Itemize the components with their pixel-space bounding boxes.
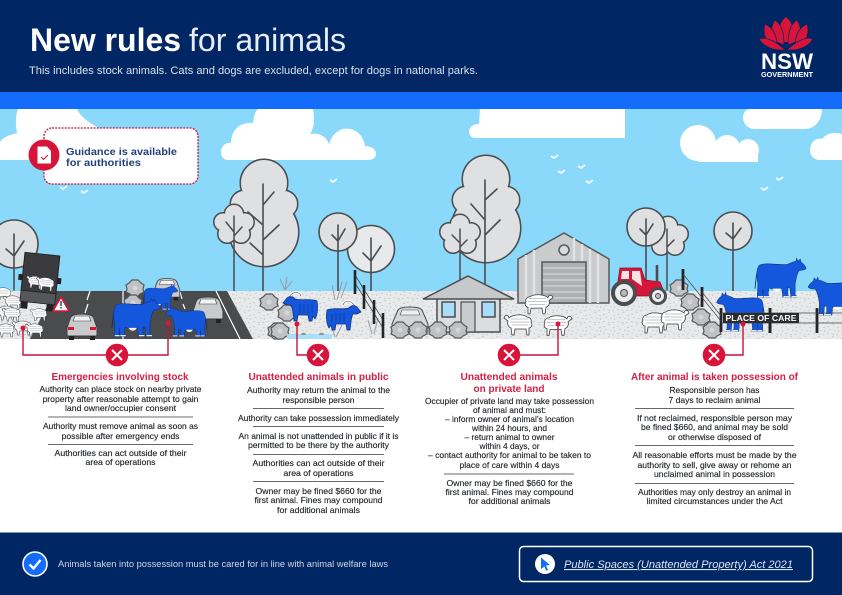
- panel: after animal is taken possession of: If not reclaimed, responsible person may: [637, 413, 793, 423]
- panel: unattended animals on private land: within 4 days, or: [479, 441, 540, 451]
- panel: unattended animals in public: first animal. Fines may compound: [254, 495, 383, 505]
- panel: unattended animals in public: Owner may be fined $660 for the: [256, 486, 382, 496]
- left fence: [355, 270, 383, 338]
- callout: guidance: Guidance is available: [66, 146, 177, 158]
- panel: after animal is taken possession of: Responsible person has: [670, 385, 760, 395]
- panel: unattended animals on private land: on private land: [474, 384, 544, 395]
- pond and grass: [280, 277, 378, 339]
- cows in place of care: [717, 258, 842, 331]
- panel: unattended animals on private land: [425, 372, 594, 506]
- link button: [520, 546, 812, 582]
- panel: after animal is taken possession of: After animal is taken possession of: [631, 372, 799, 383]
- connector: after possession: [703, 322, 746, 366]
- panel: after animal is taken possession of: authority to sell, give away or rehome an: [638, 460, 792, 470]
- NSW Government logo: GOVERNMENT: [761, 72, 814, 79]
- panel: after animal is taken possession of: limited circumstances under the Act: [646, 496, 783, 506]
- panel: emergencies involving stock: [40, 372, 202, 467]
- parked car: [392, 307, 428, 332]
- connector: public: [294, 322, 329, 366]
- tree: round pair: [319, 213, 394, 297]
- road: [30, 291, 253, 339]
- sky: [0, 109, 842, 291]
- connector: emergencies: [20, 320, 170, 366]
- panel: unattended animals in public: An animal is not unattended in public if it is: [238, 431, 398, 441]
- NSW Government logo: NSW: [761, 49, 813, 74]
- title: for animals: [189, 22, 346, 58]
- right fence and sign: [683, 269, 842, 333]
- tractor: [613, 265, 666, 304]
- panel: unattended animals on private land: – return animal to owner: [464, 432, 555, 442]
- house: [423, 276, 514, 332]
- panel: emergencies involving stock: possible after emergency ends: [62, 431, 180, 441]
- tree: big left: [230, 160, 298, 300]
- panel: unattended animals on private land: Owner may be fined $660 for the: [446, 478, 573, 488]
- panel: unattended animals in public: permitted to be there by the authority: [248, 440, 390, 450]
- tree: small centre: [440, 215, 480, 282]
- tree: right group: [627, 208, 752, 297]
- shrubs: [124, 280, 721, 339]
- panel: unattended animals in public: area of operations: [284, 468, 354, 478]
- panel: unattended animals in public: [238, 372, 400, 515]
- panel: emergencies involving stock: area of operations: [86, 457, 156, 467]
- panel: after animal is taken possession of: unclaimed animal in possession: [654, 469, 775, 479]
- right fence and sign: PLACE OF CARE: [726, 313, 797, 323]
- barn: [518, 233, 609, 303]
- icon: check: [23, 552, 47, 576]
- panel: unattended animals on private land: – inform owner of animal’s location: [445, 414, 574, 424]
- panel: emergencies involving stock: Authority must remove animal as soon as: [43, 421, 198, 431]
- panel: emergencies involving stock: Emergencies involving stock: [52, 372, 189, 383]
- title: New rules: [30, 22, 181, 58]
- panel: after animal is taken possession of: be fined $660, and animal may be sold: [641, 422, 788, 432]
- ground: [0, 291, 842, 339]
- tree: small left: [214, 205, 254, 291]
- panel: unattended animals in public: Authority can take possession immediately: [238, 413, 400, 423]
- panel: unattended animals on private land: of animal and must:: [473, 405, 546, 415]
- panel: after animal is taken possession of: Authorities may only destroy an animal in: [638, 487, 791, 497]
- goats: [283, 292, 361, 330]
- clouds: [0, 109, 842, 162]
- cows on road: [112, 284, 207, 336]
- subtitle: This includes stock animals. Cats and dogs are excluded, except for dogs in national parks.: [29, 65, 478, 77]
- panel: unattended animals on private land: – contact authority for animal to be taken to: [428, 450, 591, 460]
- panel: after animal is taken possession of: All reasonable efforts must be made by the: [632, 450, 797, 460]
- truck with sheep: [15, 252, 64, 312]
- footer note: Animals taken into possession must be cared for in line with animal welfare laws: [58, 559, 389, 569]
- panel: emergencies involving stock: land owner/occupier consent: [65, 403, 177, 413]
- house shrubs: [391, 322, 467, 338]
- link button: Public Spaces (Unattended Property) Act 2021: [564, 559, 793, 571]
- cars on road: [67, 278, 223, 340]
- panel: after animal is taken possession of: or otherwise disposed of: [668, 432, 762, 442]
- tree: big centre: [452, 156, 520, 285]
- sheep in paddock: [504, 295, 689, 335]
- NSW Government logo: [759, 17, 814, 79]
- panel: unattended animals in public: Authorities can act outside of their: [252, 458, 385, 468]
- panel: emergencies involving stock: property after reasonable attempt to gain: [42, 394, 199, 404]
- connector: private land: [498, 322, 560, 366]
- escaped sheep group: [0, 288, 47, 337]
- panel: unattended animals on private land: within 24 hours, and: [471, 423, 547, 433]
- panel: unattended animals on private land: place of care within 4 days: [460, 460, 560, 470]
- panel: after animal is taken possession of: 7 days to reclaim animal: [668, 395, 761, 405]
- panel: unattended animals on private land: Unattended animals: [460, 372, 558, 383]
- panel: emergencies involving stock: Authority can place stock on nearby private: [40, 384, 202, 394]
- panel: unattended animals in public: Unattended animals in public: [248, 372, 389, 383]
- birds: [60, 155, 783, 193]
- callout: guidance: for authorities: [66, 157, 141, 169]
- footer: [0, 532, 842, 595]
- panel: unattended animals in public: for additional animals: [277, 505, 360, 515]
- callout: guidance: [28, 128, 198, 184]
- panel: after animal is taken possession of: [631, 372, 799, 506]
- panel: unattended animals on private land: first animal. Fines may compound: [446, 487, 574, 497]
- panel: unattended animals on private land: Occupier of private land may take possession: [425, 396, 594, 406]
- panel: unattended animals on private land: for additional animals: [468, 496, 550, 506]
- tree: far left: [0, 220, 38, 290]
- panel: emergencies involving stock: Authorities can act outside of their: [54, 448, 187, 458]
- header band: [0, 0, 842, 109]
- trees: [0, 156, 752, 300]
- panel: unattended animals in public: Authority may return the animal to the: [247, 385, 390, 395]
- panel: unattended animals in public: responsible person: [282, 395, 355, 405]
- warning triangle: [53, 297, 69, 311]
